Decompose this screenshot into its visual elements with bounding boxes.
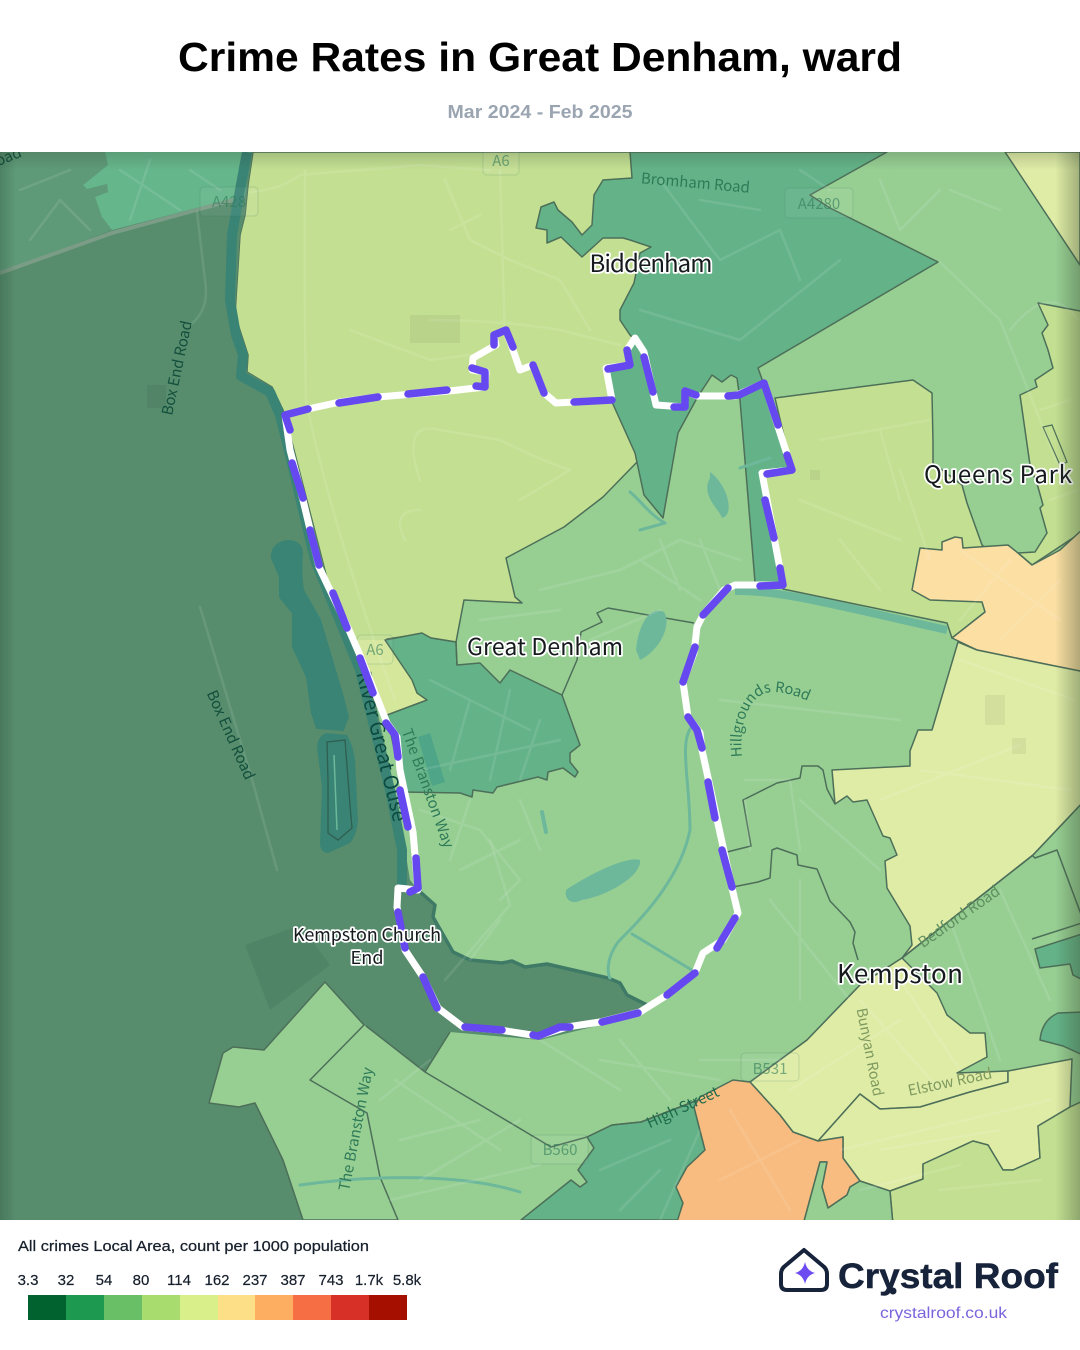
area: Elstow pale: [818, 1059, 1072, 1191]
area: east pale strip: [1032, 922, 1080, 939]
legend values: 54: [96, 1272, 112, 1289]
place label: Kempston Church End: Kempston Church: [293, 921, 441, 947]
area: Kempston central pale: [750, 958, 1008, 1141]
road shield: B560: B560: [543, 1139, 577, 1160]
area: east yellow-green: [762, 380, 1000, 638]
legend values: 32: [58, 1272, 74, 1289]
area: darker field tint: [245, 925, 330, 1010]
road label: The Branston Way north: The Branston Way: [397, 726, 460, 851]
outline: narrow plot: [1043, 425, 1067, 465]
place label: Biddenham: Biddenham: [590, 244, 712, 279]
ward boundary: Great Denham dashed outline: [285, 330, 792, 1036]
legend values: 743: [318, 1272, 344, 1289]
place label: Great Denham: Great Denham: [467, 628, 623, 662]
road shield: A428: [200, 187, 258, 216]
area: south-east yellow-green: [890, 1100, 1080, 1225]
area: Kempston Church End edge: [366, 1026, 551, 1147]
website: crystalroof.co.uk: [880, 1305, 1008, 1322]
area: Queens Park peach: [912, 527, 1080, 672]
lake: southern pit: [317, 733, 358, 853]
road label: Hillgrounds Road: Hillgrounds Road: [730, 682, 812, 756]
boundary: B560 to High Street: [551, 1100, 698, 1147]
subtitle: date range: Mar 2024 - Feb 2025: [448, 102, 632, 122]
legend values: 162: [204, 1272, 230, 1289]
road shield: B531: B531: [753, 1058, 787, 1079]
legend values: 114: [167, 1272, 191, 1289]
road shield: A4280: A4280: [798, 193, 840, 214]
area: river band north of Kempston: [735, 591, 947, 630]
brand name: Crystal Roof: [838, 1257, 1058, 1296]
field blocks: [147, 315, 1026, 754]
legend title: All crimes Local Area, count per 1000 population: [18, 1238, 369, 1255]
road label: The Branston Way south: The Branston Way: [333, 1065, 378, 1193]
water: ponds and streams: [300, 458, 770, 1192]
road: A428: [0, 197, 245, 273]
place label: Kempston Church End: [293, 921, 441, 970]
map edge shading: [0, 152, 1080, 1220]
area: central west mid green: [521, 1100, 705, 1220]
title: Crime Rates in Great Denham, ward: [178, 34, 902, 80]
boundary: east estate: [1032, 849, 1080, 914]
area: east lobe mid green: [1040, 1012, 1080, 1056]
road shield: A428: A428: [212, 191, 246, 212]
road label: River Great Ouse: River Great Ouse: [351, 668, 416, 824]
area: south light green: [803, 1162, 893, 1225]
road shield: A6 south: A6: [366, 639, 384, 660]
icon: house with star: [781, 1250, 827, 1290]
legend values: 1.7k: [355, 1272, 384, 1289]
area: top-right pale: [1005, 152, 1080, 265]
river: Great Ouse: [230, 152, 402, 890]
boundaries: Great Denham inner: [562, 608, 694, 695]
lake: northern pit: [272, 541, 348, 730]
area: north-west estate mid green: [83, 152, 250, 230]
area: upper Kempston pale: [832, 642, 1080, 958]
road label: Bunyan Road: Bunyan Road: [852, 1006, 889, 1098]
area: north-west lighter dark green: [0, 152, 112, 272]
road label: High Street: High Street: [643, 1081, 723, 1133]
place label: Queens Park: Queens Park: [924, 455, 1072, 490]
road shield: A6 south: [357, 635, 393, 664]
road label: Box End Road south: Box End Road: [202, 687, 260, 783]
road shield: B531: [741, 1053, 799, 1081]
road shield: B560: [531, 1135, 588, 1164]
area: north-east strip yellow-green: [1018, 303, 1080, 565]
boundaries: Hillgrounds estate: [727, 766, 835, 852]
legend colour scale: [28, 1295, 407, 1320]
boundary: dark wedge south: [425, 1032, 450, 1072]
area: north-west yellow-green: [236, 152, 649, 642]
roads and streets: [20, 160, 1078, 1220]
map base: light green crime band: [311, 152, 1080, 1220]
boundary: Bedford Road: [750, 800, 1080, 1082]
boundary: river edge of south dark area: [418, 890, 647, 1005]
area: SW light green: [209, 982, 398, 1220]
road shield: A4280: [785, 188, 853, 218]
road shield: A6 north: A6: [492, 150, 510, 171]
legend values: 3.3: [18, 1272, 38, 1289]
logo: Crystal Roof: [781, 1250, 1058, 1322]
legend values: 237: [242, 1272, 268, 1289]
area: orange high crime: [676, 1080, 860, 1225]
area: west dark green: [0, 152, 647, 1220]
legend values: [18, 1272, 422, 1289]
area: Biddenham wedge mid green: [536, 152, 938, 585]
area: Great Denham south-west mid green: [385, 633, 580, 797]
road label: Elstow Road: Elstow Road: [906, 1062, 994, 1101]
legend: [18, 1238, 422, 1320]
road label: Box End Road north: Box End Road: [156, 319, 197, 417]
road label: Bedford Road: Bedford Road: [914, 880, 1004, 952]
legend values: 80: [133, 1272, 149, 1289]
road shield: A6 north: [483, 146, 519, 175]
place label: Kempston: Kempston: [837, 954, 963, 991]
area: east mid-green block: [1035, 933, 1080, 981]
logo y tail dot: [890, 1288, 896, 1294]
boundaries: Kempston west estate: [733, 848, 858, 960]
area: pale A6 strip: [358, 640, 426, 714]
road label: Bromham Road: Bromham Road: [640, 167, 751, 198]
legend values: 5.8k: [393, 1272, 422, 1289]
boundaries: Great Denham centre: [456, 642, 457, 665]
place label: Kempston Church End: End: [350, 944, 384, 970]
legend values: 387: [280, 1272, 306, 1289]
